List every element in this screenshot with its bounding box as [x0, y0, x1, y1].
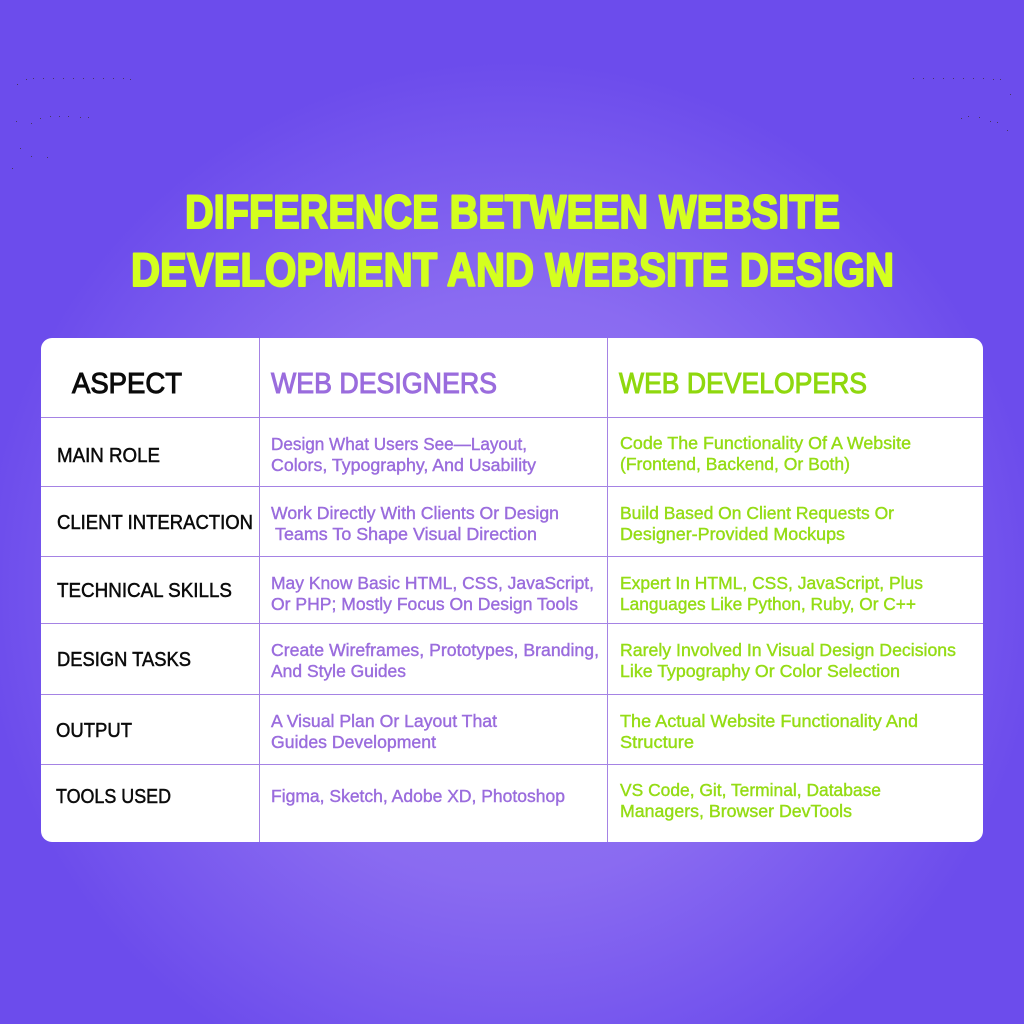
row: design tasks: Create Wireframes, Prototypes, Branding,: [271, 640, 599, 660]
row: main role: [57, 433, 911, 475]
table panel: [41, 338, 983, 842]
comparison table: [41, 338, 983, 842]
title: DIFFERENCE BETWEEN WEBSITE: [185, 185, 840, 238]
row: main role: Code The Functionality Of A Website: [620, 433, 911, 453]
table grid: [41, 338, 983, 842]
header row: [72, 368, 867, 400]
row: tools used: VS Code, Git, Terminal, Database: [620, 780, 881, 800]
row: output: Structure: [620, 732, 694, 752]
row: client interaction: CLIENT INTERACTION: [57, 512, 253, 534]
decorative dots top right: [913, 78, 1011, 131]
row: client interaction: Designer-Provided Mockups: [620, 524, 845, 544]
row: technical skills: [57, 573, 923, 614]
row: main role: Colors, Typography, And Usability: [271, 455, 536, 475]
row: main role: (Frontend, Backend, Or Both): [620, 454, 850, 474]
header row: WEB DESIGNERS: [271, 368, 497, 400]
row: output: A Visual Plan Or Layout That: [271, 711, 497, 731]
row: output: The Actual Website Functionality And: [620, 711, 918, 731]
row: technical skills: Expert In HTML, CSS, JavaScript, Plus: [620, 573, 923, 593]
row: design tasks: And Style Guides: [271, 661, 406, 681]
row: technical skills: TECHNICAL SKILLS: [57, 580, 232, 602]
row: client interaction: Work Directly With Clients Or Design: [271, 503, 559, 523]
row: technical skills: May Know Basic HTML, CSS, JavaScript,: [271, 573, 594, 593]
row: tools used: Managers, Browser DevTools: [620, 801, 852, 821]
row: design tasks: Rarely Involved In Visual Design Decisions: [620, 640, 956, 660]
row: client interaction: Teams To Shape Visual Direction: [275, 524, 537, 544]
row: output: [56, 711, 918, 752]
row: tools used: TOOLS USED: [56, 786, 171, 808]
row: tools used: Figma, Sketch, Adobe XD, Photoshop: [271, 786, 565, 806]
row: design tasks: [57, 640, 956, 681]
header row: WEB DEVELOPERS: [619, 368, 867, 400]
row: main role: MAIN ROLE: [57, 445, 160, 467]
row: main role: Design What Users See—Layout,: [271, 434, 527, 454]
row: technical skills: Languages Like Python, Ruby, Or C++: [620, 594, 916, 614]
row: client interaction: Build Based On Client Requests Or: [620, 503, 894, 523]
title: [131, 185, 894, 296]
row: design tasks: Like Typography Or Color Selection: [620, 661, 900, 681]
header row: ASPECT: [72, 368, 182, 400]
decorative dots top left: [12, 78, 131, 169]
row: technical skills: Or PHP; Mostly Focus On Design Tools: [271, 594, 578, 614]
row: tools used: [56, 780, 881, 821]
row: client interaction: [57, 503, 894, 544]
row: output: OUTPUT: [56, 720, 132, 742]
row: design tasks: DESIGN TASKS: [57, 649, 191, 671]
row: output: Guides Development: [271, 732, 436, 752]
title: DEVELOPMENT AND WEBSITE DESIGN: [131, 243, 894, 296]
